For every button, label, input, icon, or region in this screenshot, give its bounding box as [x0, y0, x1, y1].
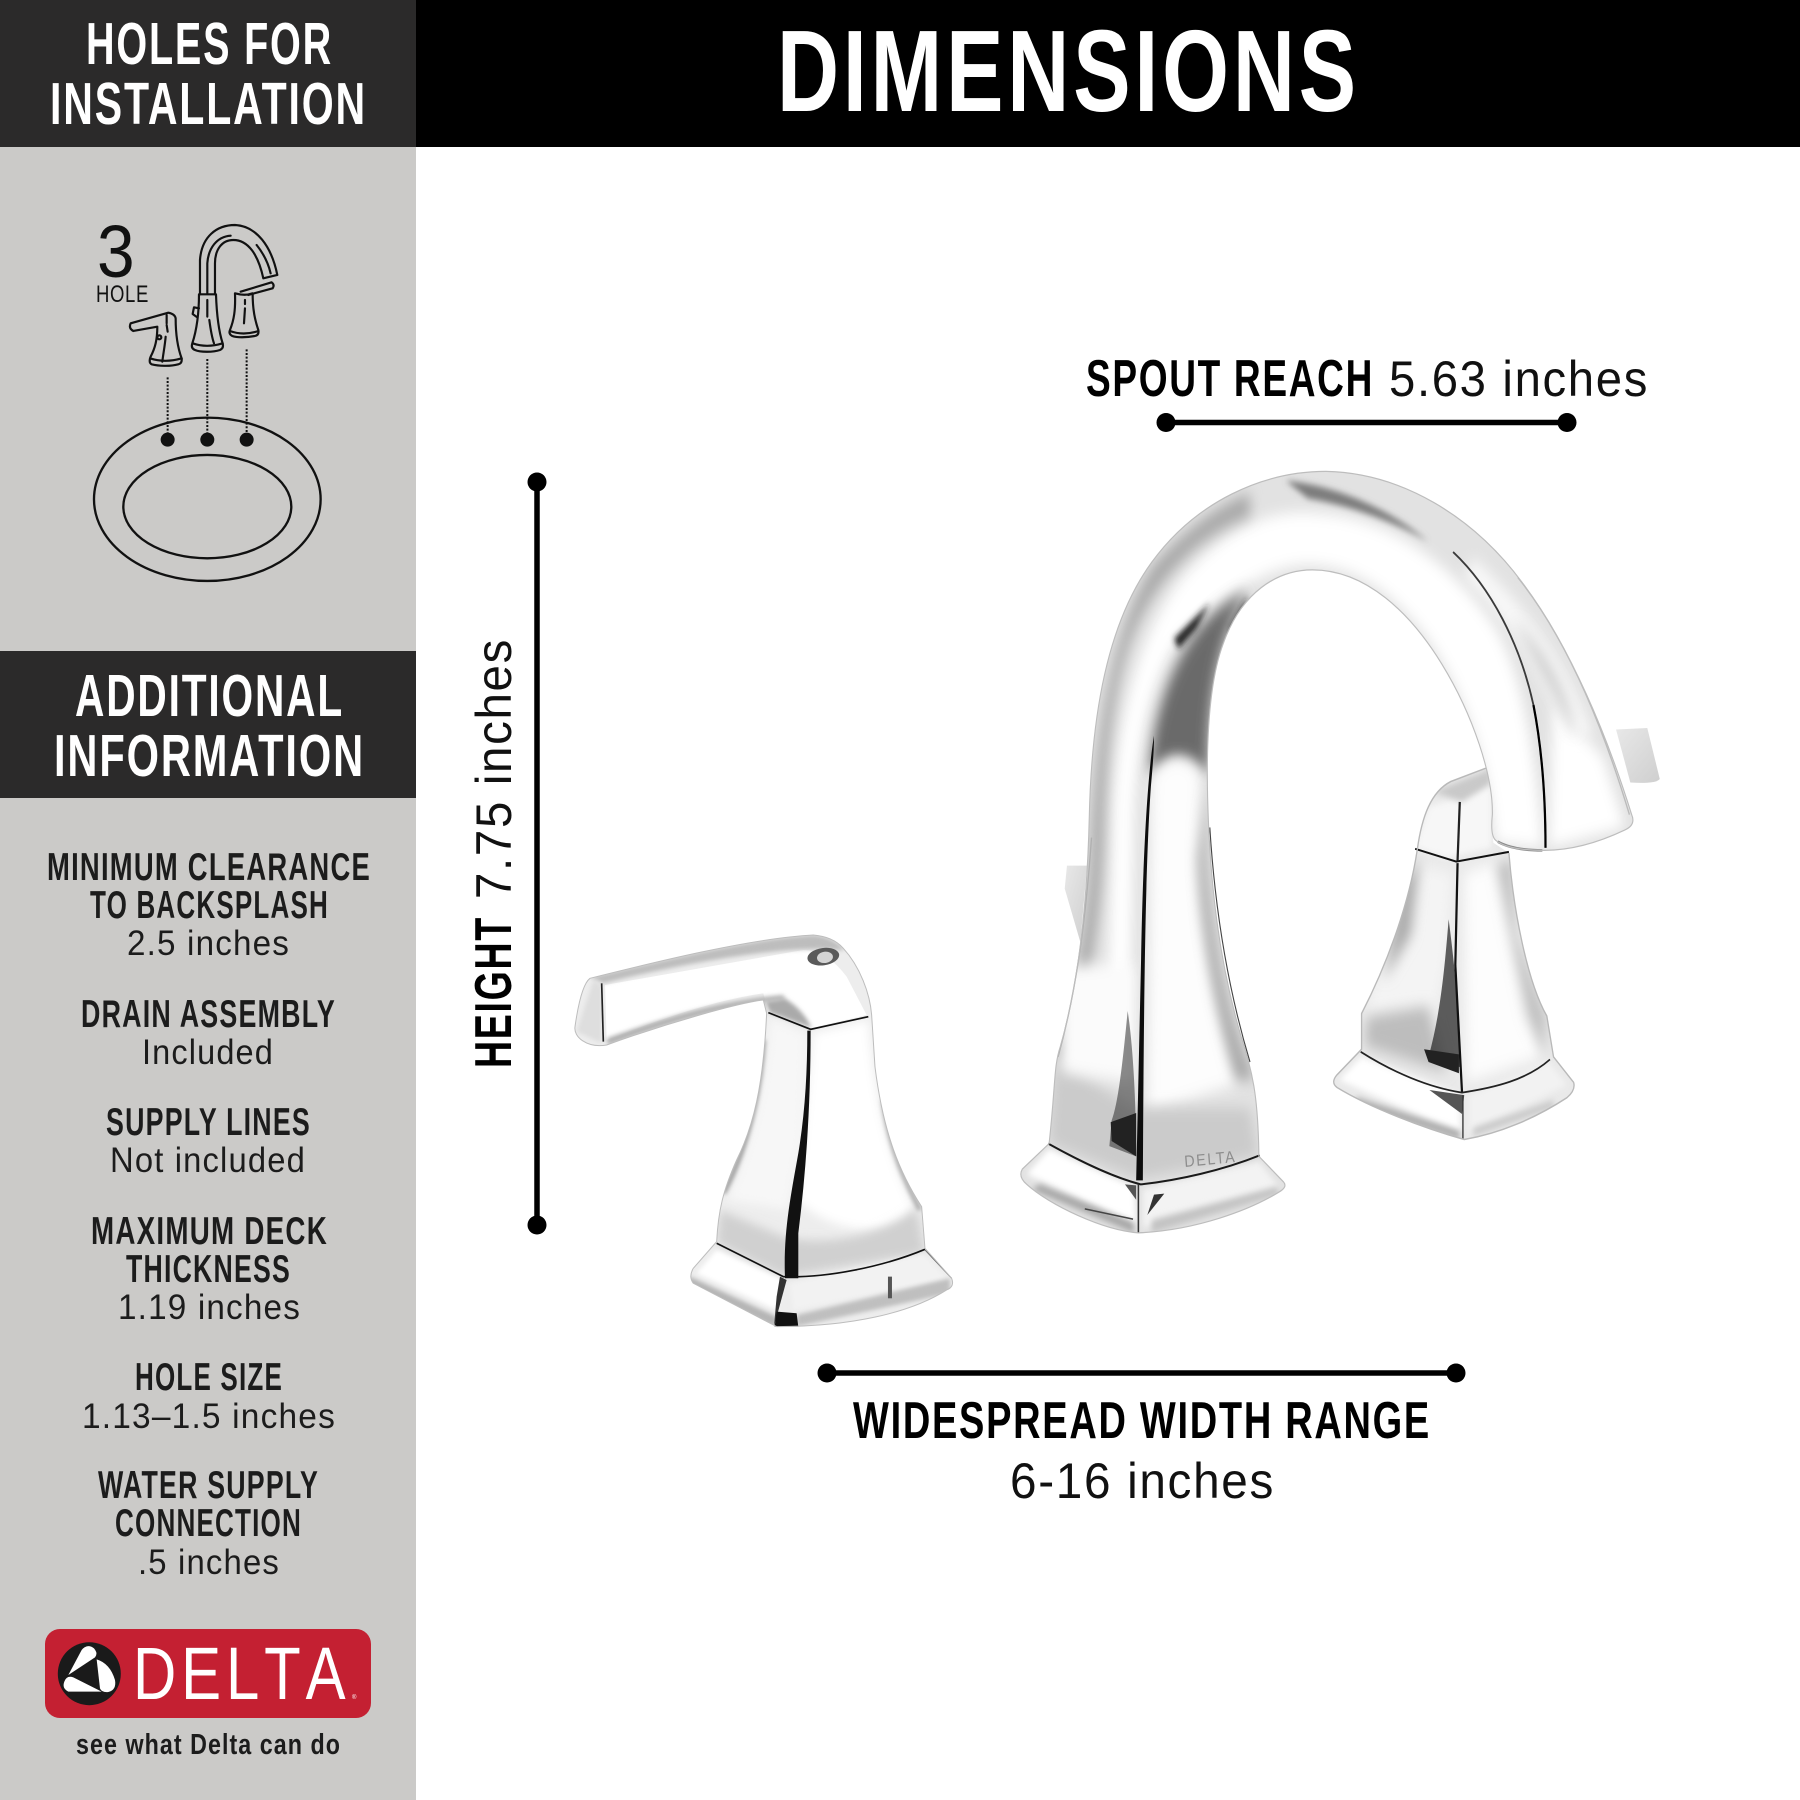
dimension: spout reach: 5.63 inches	[1389, 351, 1649, 407]
dimension: height: HEIGHT	[465, 916, 523, 1068]
dimension: height: 7.75 inches	[466, 638, 522, 899]
spec: minimum clearance to backsplash: 2.5 inches	[127, 924, 290, 963]
spec: hole size: HOLE SIZE	[135, 1356, 283, 1399]
dimension: widespread width range: 6-16 inches	[1010, 1453, 1275, 1509]
dimension: spout reach: SPOUT REACH	[1086, 350, 1374, 408]
photo: left handle	[570, 930, 960, 1330]
spec: supply lines: SUPPLY LINES	[106, 1101, 311, 1144]
panel: additional information heading: ADDITIONAL	[75, 663, 344, 729]
chrome streaks	[1136, 736, 1154, 1180]
tagline: see what Delta can do	[76, 1729, 341, 1761]
engraved delta mark: DELTA	[1184, 1148, 1236, 1171]
spec: hole size	[82, 1356, 336, 1436]
lower band	[1049, 1057, 1259, 1179]
logo: delta: DELTA	[133, 1633, 350, 1715]
panel: holes for installation heading	[0, 0, 416, 147]
spec: hole size: 1.13–1.5 inches	[82, 1397, 336, 1436]
spec: water supply connection: CONNECTION	[115, 1502, 302, 1545]
spec: minimum clearance to backsplash: TO BACKSPLASH	[90, 884, 329, 927]
icon: three hole faucet over sink	[94, 225, 321, 581]
spec: water supply connection: .5 inches	[138, 1543, 280, 1582]
icon label: 3 hole	[96, 210, 149, 308]
panel: additional information heading: INFORMATION	[54, 723, 365, 789]
left handle lever behind spout	[1065, 866, 1087, 942]
dimension: height	[465, 472, 546, 1234]
spec: minimum clearance to backsplash	[47, 846, 371, 963]
spec: maximum deck thickness: MAXIMUM DECK	[91, 1210, 328, 1253]
spec: drain assembly	[81, 993, 336, 1072]
spec: maximum deck thickness	[91, 1210, 328, 1327]
logo: delta	[45, 1629, 371, 1718]
spec: minimum clearance to backsplash: MINIMUM CLEARANCE	[47, 846, 371, 889]
logo: delta: ®	[352, 1694, 357, 1701]
spec: maximum deck thickness: 1.19 inches	[118, 1288, 301, 1327]
dimension: spout reach	[1086, 350, 1649, 432]
panel: holes for installation heading: HOLES FOR	[86, 11, 333, 77]
panel: left sidebar	[0, 0, 416, 1800]
icon label: 3 hole: HOLE	[96, 281, 149, 308]
spec: maximum deck thickness: THICKNESS	[126, 1248, 291, 1291]
base	[1027, 1149, 1136, 1225]
spec: drain assembly: Included	[142, 1033, 274, 1072]
spec: drain assembly: DRAIN ASSEMBLY	[81, 993, 336, 1036]
icon label: 3 hole: 3	[97, 210, 137, 293]
header bar: dimensions	[416, 0, 1800, 147]
panel: additional information heading	[0, 651, 416, 798]
dimension: widespread width range	[818, 1364, 1466, 1509]
handle details	[602, 983, 603, 1042]
spec: water supply connection: WATER SUPPLY	[98, 1464, 319, 1507]
panel: holes for installation heading: INSTALLATION	[50, 71, 367, 137]
photo: faucet spout and right handle	[1013, 465, 1660, 1240]
inner face dark	[1150, 590, 1248, 776]
main spout body	[1013, 465, 1647, 1240]
dimension: widespread width range: WIDESPREAD WIDTH RANGE	[853, 1392, 1431, 1450]
title: dimensions: DIMENSIONS	[777, 6, 1360, 136]
top dark wedge	[1286, 481, 1429, 542]
outer edge shade	[1054, 493, 1250, 1062]
spec: water supply connection	[98, 1464, 319, 1582]
soft white highlights	[1106, 508, 1544, 969]
right handle	[1330, 756, 1580, 1149]
right handle lever behind spout	[1616, 728, 1660, 783]
spec: supply lines: Not included	[110, 1141, 306, 1180]
spec: supply lines	[106, 1101, 311, 1180]
